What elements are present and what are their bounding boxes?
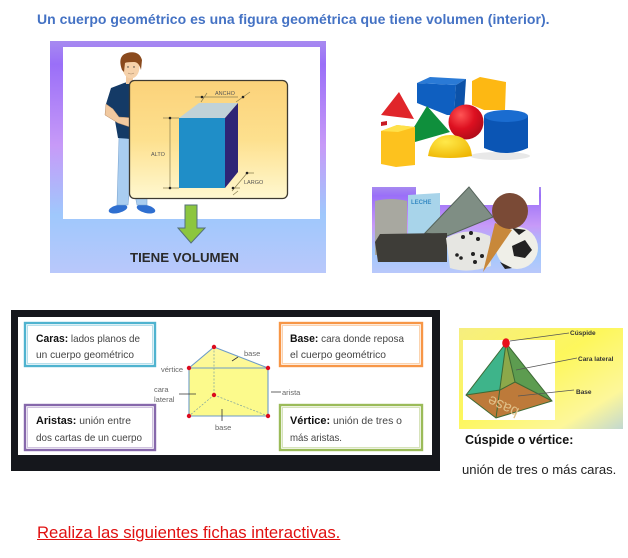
- icon: box: [179, 103, 238, 188]
- card: [130, 80, 288, 198]
- prism diagram: base: [244, 349, 260, 358]
- prism diagram: cara: [154, 385, 169, 394]
- image: everyday objects: LECHE: [411, 200, 431, 206]
- callout: vertice: [280, 405, 422, 450]
- callout: aristas: [25, 405, 155, 450]
- label: tiene volumen: TIENE VOLUMEN: [130, 250, 239, 265]
- icon: green arrow: [178, 205, 205, 243]
- panel: elementos de un cuerpo: [11, 310, 440, 471]
- panel: tiene volumen: [50, 41, 326, 273]
- card: LARGO: [244, 180, 264, 186]
- icon: boy: [105, 52, 156, 215]
- black box: [375, 233, 447, 262]
- image: coloured solids: [381, 77, 530, 167]
- title: Un cuerpo geométrico es una figura geométrica que tiene volumen (interior).: [37, 11, 550, 27]
- prism diagram: lateral: [154, 395, 175, 404]
- soccer ball: [496, 227, 538, 269]
- prism diagram: [154, 345, 301, 432]
- prism diagram: base: [215, 423, 231, 432]
- link: fichas interactivas: Realiza las siguientes fichas interactivas.: [37, 523, 340, 542]
- callout: base: el cuerpo geométrico: [290, 349, 386, 361]
- milk carton: [408, 193, 440, 236]
- callout: vertice: más aristas.: [290, 432, 342, 444]
- prism diagram: vértice: [161, 365, 183, 374]
- card: ALTO: [151, 152, 166, 158]
- callout: caras: un cuerpo geométrico: [36, 349, 134, 361]
- panel: pyramid: Base: [576, 389, 592, 396]
- dimension lines: [163, 92, 254, 195]
- panel: pyramid: [459, 328, 623, 429]
- callout: caras: [25, 323, 155, 366]
- callout: base: [280, 323, 422, 366]
- prism diagram: arista: [282, 388, 301, 397]
- callout: aristas: dos cartas de un cuerpo: [36, 432, 142, 444]
- panel: pyramid: base: [485, 392, 522, 421]
- callout: base: Base: cara donde reposa: [290, 333, 404, 345]
- panel: pyramid: Cara lateral: [578, 356, 614, 363]
- card: ANCHO: [215, 91, 236, 97]
- panel: pyramid: Cúspide: [570, 330, 596, 337]
- heading: cuspide: Cúspide o vértice:: [465, 433, 573, 447]
- image: everyday objects: [372, 187, 541, 273]
- callout: caras: Caras: lados planos de: [36, 333, 140, 345]
- callout: aristas: Aristas: unión entre: [36, 415, 131, 427]
- text: cuspide definition: unión de tres o más caras.: [462, 462, 616, 477]
- callout: vertice: Vértice: unión de tres o: [290, 415, 402, 427]
- dice: [446, 231, 491, 271]
- pyramid: [425, 187, 493, 236]
- ice cream: [483, 223, 512, 272]
- can: [375, 199, 407, 255]
